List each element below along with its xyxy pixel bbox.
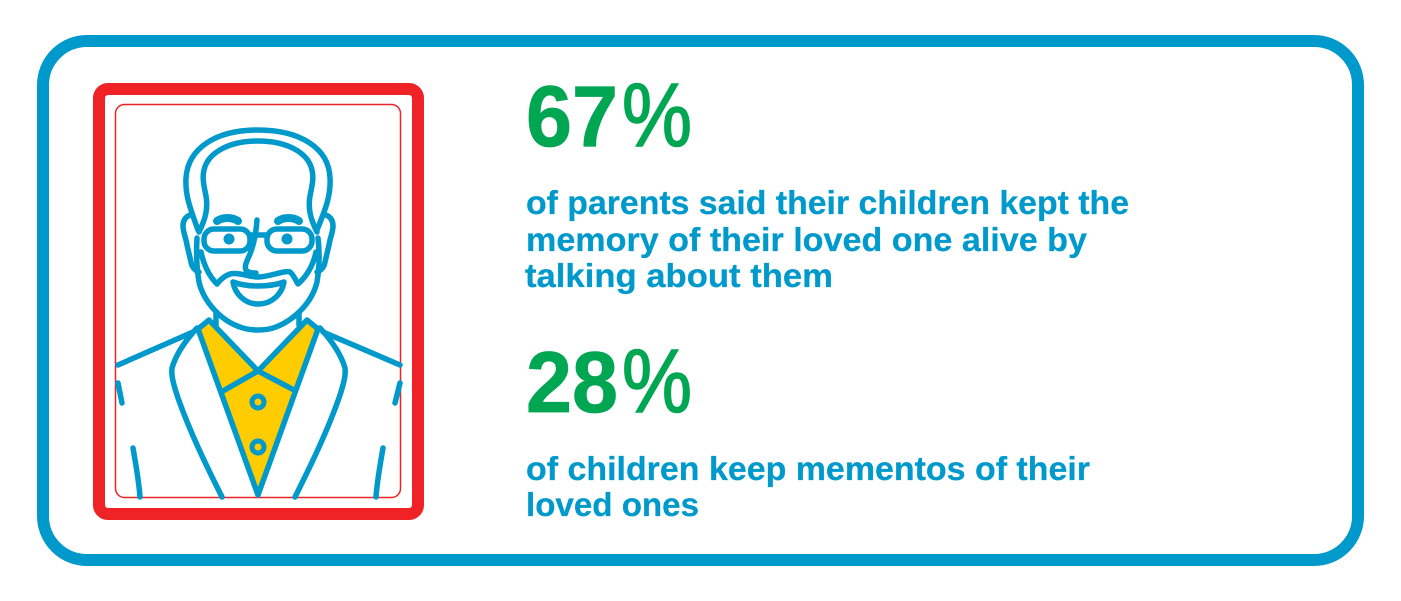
icon: eyes [224,234,292,244]
text block: 67% description [525,185,1129,295]
text block: 67% description: memory of their loved one alive by [526,222,1087,259]
statistic: 28%: 28 [526,335,618,431]
icon: shirt buttons [252,396,264,453]
icon: yellow shirt collar and front [198,320,318,497]
text block: 28% description: of children keep mementos of their [526,451,1090,488]
text block: 28% description [526,451,1090,524]
statistic: 67% [526,66,692,166]
statistic: 67%: % [622,66,692,166]
text block: 67% description: of parents said their children kept the [526,185,1129,222]
text block: 28% description: loved ones [526,487,699,524]
picture frame: thick red border [99,89,418,514]
statistic: 67%: 67 [526,69,618,165]
picture frame: thin red inner border [116,104,400,498]
icon: man's head [183,130,333,330]
statistic: 28% [526,332,692,432]
statistic: 28%: % [622,332,692,432]
panel: portrait illustration [99,89,418,514]
icon: suit jacket and collar lines [118,320,400,497]
text block: 67% description: talking about them [525,258,833,295]
